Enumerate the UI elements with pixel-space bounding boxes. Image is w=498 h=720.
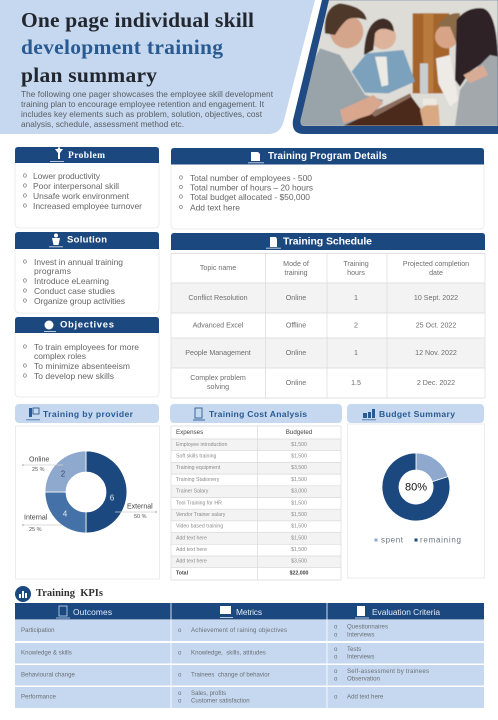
cost table: Add text here	[176, 535, 207, 541]
icon: target hand	[44, 320, 56, 332]
table rows: Online	[286, 349, 306, 357]
KPI header row: Outcomes	[73, 607, 112, 617]
description text	[21, 89, 274, 129]
cost table: $1,500	[291, 477, 307, 483]
KPI rows: Knowledge & skills	[21, 650, 72, 656]
callout: internal	[22, 514, 62, 533]
KPI rows: Behavioural change	[21, 672, 75, 678]
cost table: Vendor Trainer salary	[176, 512, 226, 518]
solution heading: Solution	[67, 234, 107, 246]
KPI rows: o	[334, 694, 338, 700]
objectives list: o	[23, 372, 27, 380]
panel: solution	[15, 232, 159, 313]
KPI rows: Interviews	[347, 654, 374, 660]
problem list	[23, 171, 142, 211]
cost table: $1,500	[291, 547, 307, 553]
problem list: Unsafe work environment	[33, 191, 130, 201]
problem list: o	[23, 172, 27, 180]
donut chart: budget	[382, 453, 450, 521]
panel: training schedule	[171, 233, 485, 398]
KPI rows: Interviews	[347, 632, 374, 638]
cost table: Training Stationery	[176, 477, 220, 483]
KPI header row: Evaluation Criteria	[372, 607, 440, 617]
solution list: Organize group activities	[34, 296, 125, 306]
cost table: Training equipment	[176, 465, 221, 471]
solution list	[23, 257, 125, 306]
callout: external: 50 %	[134, 514, 147, 520]
details heading	[171, 148, 484, 164]
details list: Add text here	[190, 202, 240, 212]
schedule table	[171, 253, 485, 398]
panel: training by provider	[15, 404, 160, 579]
solution list: o	[23, 298, 27, 304]
KPI table	[15, 603, 484, 708]
cost table: $3,000	[291, 489, 307, 495]
header banner	[0, 0, 315, 134]
description text: The following one pager showcases the employee skill development	[21, 89, 274, 99]
table rows: Complex problem	[190, 374, 246, 382]
solution list: Conduct case studies	[34, 286, 115, 296]
callout: external	[115, 504, 157, 520]
legend: spent	[381, 536, 404, 544]
solution list: o	[23, 288, 27, 294]
cost table: Expenses	[176, 429, 203, 436]
table rows: Offline	[286, 322, 306, 330]
icon: document	[248, 152, 264, 163]
details list: o	[179, 204, 183, 211]
description text: training plan to encourage employee retention and engagement. It	[21, 99, 265, 109]
cost table: Total	[176, 571, 189, 577]
KPI rows: Tests	[347, 646, 361, 653]
cost table: $1,500	[291, 500, 307, 506]
details list: Total number of employees - 500	[190, 173, 312, 183]
objectives list: To train employees for more	[34, 342, 139, 352]
cost table: Video based training	[176, 524, 223, 530]
KPI rows: o	[178, 650, 182, 656]
title	[21, 8, 254, 87]
table rows: 12 Nov. 2022	[415, 349, 457, 357]
callout: online: Online	[29, 456, 49, 464]
cost table: $1,500	[291, 512, 307, 518]
icon: checklist	[355, 606, 369, 618]
problem list: Increased employee turnover	[33, 201, 142, 211]
KPI rows: Self-assessment by trainees	[347, 668, 429, 675]
details list: o	[179, 194, 183, 200]
callout: online	[22, 456, 63, 473]
KPI rows: o	[334, 632, 338, 638]
KPI rows: o	[334, 654, 338, 660]
table rows: 2	[354, 322, 358, 330]
cost heading	[170, 404, 342, 423]
cost table: Budgeted	[286, 429, 313, 436]
KPI rows: o	[178, 672, 182, 678]
title: One page individual skill	[21, 8, 254, 32]
table rows: People Management	[185, 349, 251, 357]
callout: online: 25 %	[32, 467, 45, 473]
details list: o	[179, 174, 183, 182]
KPI rows: Achievement of raining objectives	[191, 627, 287, 634]
problem list: Lower productivity	[33, 171, 101, 181]
icon: notebook	[266, 237, 281, 248]
icon: trophy figure	[50, 147, 64, 162]
title: plan summary	[21, 63, 157, 87]
details list: Total budget allocated - $50,000	[190, 192, 310, 202]
table header row: Training	[343, 260, 369, 268]
table rows: Online	[286, 294, 306, 302]
description text: includes key elements such as problem, solution, objectives, cost	[21, 109, 263, 119]
callout: internal: Internal	[24, 514, 48, 522]
KPI rows: Questionnaires	[347, 624, 388, 630]
cost table: $1,500	[291, 442, 307, 448]
cost table: $1,500	[291, 535, 307, 541]
cost table: Add text here	[176, 559, 207, 565]
table header row: Mode of	[283, 260, 309, 268]
table rows: solving	[207, 383, 229, 391]
table header row: date	[429, 269, 443, 277]
KPI rows: o	[334, 668, 338, 675]
panel: objectives	[15, 317, 159, 397]
table header row: hours	[347, 269, 365, 277]
table rows	[185, 294, 458, 391]
donut chart: provider: 2	[61, 470, 66, 478]
table rows: Online	[286, 379, 306, 387]
problem heading: Problem	[68, 151, 105, 161]
KPI rows: Observation	[347, 676, 380, 682]
provider heading	[15, 404, 159, 423]
solution heading	[15, 232, 159, 249]
objectives list: To develop new skills	[34, 371, 114, 381]
table rows: 1	[354, 294, 358, 302]
KPI rows: o	[334, 646, 338, 653]
cost table: Tool Training for HR	[176, 500, 222, 506]
objectives heading	[15, 317, 159, 333]
problem list: o	[23, 182, 27, 190]
KPI rows: Participation	[21, 627, 55, 634]
cost table	[171, 426, 341, 580]
cost heading: Training Cost Analysis	[209, 409, 307, 419]
problem list: Poor interpersonal skill	[33, 181, 119, 191]
icon: bar chart	[362, 409, 376, 420]
objectives list: o	[23, 362, 27, 370]
table rows: 25 Oct. 2022	[416, 322, 456, 330]
objectives list: o	[23, 344, 27, 350]
provider heading: Training by provider	[43, 409, 134, 419]
cost table: $3,500	[291, 465, 307, 471]
icon: presenter	[26, 408, 40, 420]
schedule heading	[171, 233, 485, 250]
objectives list: To minimize absenteeism	[34, 361, 130, 371]
KPI rows: Knowledge, skills, attitudes	[191, 650, 266, 656]
KPI rows: o	[334, 624, 338, 630]
icon: clipboard chart	[193, 408, 205, 420]
budget heading: Budget Summary	[379, 409, 455, 419]
budget heading	[347, 404, 484, 423]
table header row	[200, 260, 469, 277]
KPI rows: o	[178, 698, 182, 704]
callout: internal: 25 %	[29, 527, 42, 533]
problem list: o	[23, 192, 27, 200]
KPI rows: o	[178, 627, 182, 634]
KPI rows: Add text here	[347, 694, 384, 700]
title: development training	[21, 35, 223, 59]
cost table: $1,500	[291, 524, 307, 530]
objectives list	[23, 342, 139, 381]
panel: problem	[15, 147, 159, 228]
callout: external: External	[127, 504, 153, 510]
KPI header row	[15, 603, 484, 708]
table rows: Conflict Resolution	[188, 294, 248, 302]
legend: remaining	[420, 536, 461, 544]
cost table: Employee introduction	[176, 442, 227, 448]
solution list: o	[23, 258, 27, 266]
donut chart: provider: 6	[110, 494, 115, 502]
KPI header row: Metrics	[236, 607, 262, 617]
icon: monitor	[220, 606, 233, 618]
table rows: 2 Dec. 2022	[417, 379, 455, 387]
photo: team around a table	[290, 0, 498, 140]
details list: o	[179, 184, 183, 191]
table header row: training	[284, 269, 308, 277]
details list: Total number of hours – 20 hours	[190, 182, 313, 192]
solution list: Introduce eLearning	[34, 276, 109, 286]
legend	[374, 536, 461, 544]
icon: clipboard	[56, 606, 70, 618]
KPI rows: Trainees change of behavior	[191, 672, 270, 678]
solution list: programs	[34, 266, 71, 276]
cost table: $3,500	[291, 559, 307, 565]
KPI rows: o	[334, 676, 338, 682]
objectives list: complex roles	[34, 351, 86, 361]
table header row: Topic name	[200, 264, 236, 272]
donut chart: budget: 80%	[405, 482, 427, 494]
description text: analysis, schedule, assessment method etc.	[21, 119, 184, 129]
cost table: Add text here	[176, 547, 207, 553]
details heading: Training Program Details	[268, 151, 388, 162]
icon: KPI badge	[15, 586, 31, 602]
cost table: $22,000	[290, 571, 308, 577]
KPI rows: Performance	[21, 694, 56, 700]
icon: award	[49, 234, 63, 247]
panel: training program details	[171, 148, 484, 229]
cost table: $1,500	[291, 454, 307, 460]
problem heading	[15, 147, 159, 163]
cost table: Trainer Salary	[176, 489, 209, 495]
donut chart: provider	[22, 451, 157, 533]
section heading: training KPIs	[15, 586, 103, 602]
table header row: Projected completion	[403, 260, 469, 268]
KPI rows: Customer satisfaction	[191, 698, 250, 704]
section heading: training KPIs: Training KPIs	[36, 588, 103, 599]
KPI rows: o	[178, 690, 182, 697]
KPI rows	[15, 620, 484, 708]
donut chart: provider: 4	[63, 510, 68, 518]
table rows: 1	[354, 349, 358, 357]
panel: training cost analysis	[170, 404, 342, 580]
panel: budget summary	[347, 404, 484, 578]
table rows: 10 Sept. 2022	[414, 294, 458, 302]
details list	[179, 173, 313, 212]
table rows: 1.5	[351, 379, 361, 387]
solution list: Invest in annual training	[34, 257, 123, 267]
schedule heading: Training Schedule	[283, 236, 372, 248]
objectives heading: Objectives	[60, 320, 114, 330]
problem list: o	[23, 202, 27, 210]
KPI rows: Sales, profits	[191, 690, 226, 697]
solution list: o	[23, 278, 27, 284]
cost table: Soft skills training	[176, 454, 216, 460]
table rows: Advanced Excel	[193, 322, 244, 330]
